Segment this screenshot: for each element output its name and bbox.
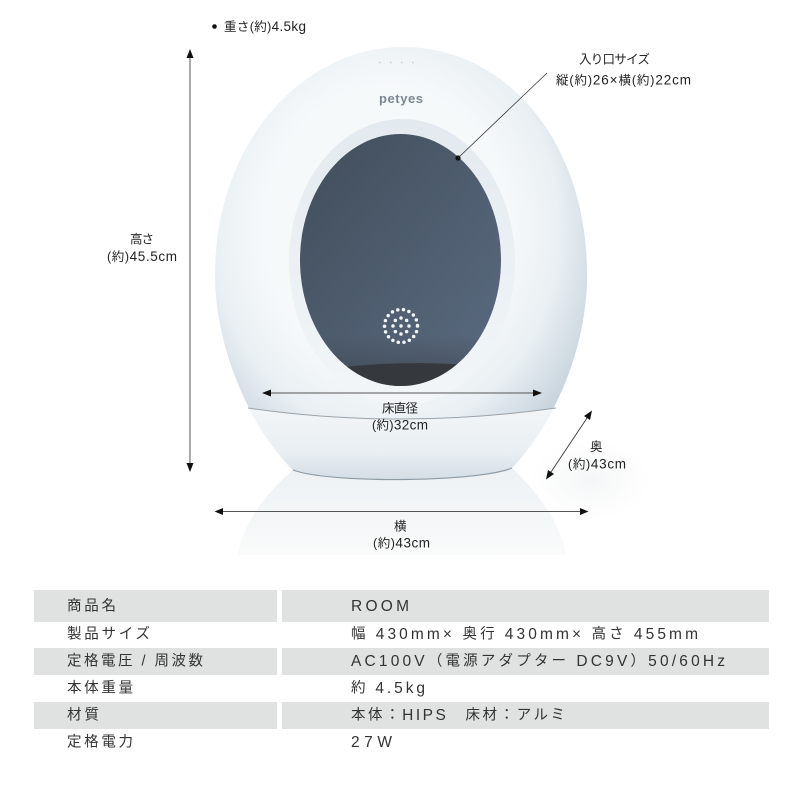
opening lower shading bbox=[328, 346, 474, 370]
entrance rim bbox=[289, 119, 515, 405]
seam line bbox=[248, 408, 556, 419]
width label bbox=[373, 520, 430, 550]
row: rated power bbox=[67, 734, 392, 751]
top indicator dots bbox=[379, 62, 423, 64]
width label: 横 bbox=[394, 520, 407, 534]
row: material bbox=[34, 702, 769, 729]
entrance opening bbox=[300, 134, 501, 386]
product reflection bbox=[238, 468, 566, 555]
entrance size callout bbox=[455, 52, 691, 161]
row: material: 本体：HIPS 床材：アルミ bbox=[351, 706, 565, 724]
row: weight: 本体重量 bbox=[67, 680, 133, 696]
row: rated power: 定格電力 bbox=[67, 734, 133, 750]
product: egg-shaped pet room bbox=[200, 47, 600, 490]
egg body bbox=[215, 47, 587, 480]
height label: 高さ bbox=[130, 232, 154, 246]
base section bbox=[250, 408, 553, 478]
depth arrow bbox=[546, 410, 592, 480]
row: product size bbox=[67, 626, 698, 643]
floor diameter label: (約)32cm bbox=[372, 418, 428, 432]
row: rated voltage: 定格電圧 / 周波数 bbox=[67, 652, 204, 670]
weight label: 重さ(約)4.5kg bbox=[224, 19, 306, 34]
row: rated voltage bbox=[34, 648, 769, 675]
floor shadow bbox=[530, 440, 650, 520]
row: product name: 商品名 bbox=[67, 598, 116, 614]
height label: (約)45.5cm bbox=[107, 249, 177, 264]
height label bbox=[107, 232, 177, 264]
row: product size: 製品サイズ bbox=[67, 626, 150, 642]
depth label bbox=[568, 440, 626, 472]
row: weight: 約 4.5kg bbox=[351, 680, 425, 697]
height arrow bbox=[186, 49, 194, 472]
row: product name: ROOM bbox=[351, 598, 409, 615]
entrance size callout: 入り口サイズ bbox=[579, 52, 650, 66]
floor diameter arrow bbox=[262, 390, 542, 396]
row: weight bbox=[67, 680, 425, 697]
bottom edge bbox=[293, 468, 512, 480]
floor mat inside bbox=[347, 363, 457, 386]
entrance size callout: 縦(約)26×横(約)22cm bbox=[556, 72, 691, 88]
depth label: 奥 bbox=[590, 440, 603, 454]
depth label: (約)43cm bbox=[568, 456, 626, 472]
width label: (約)43cm bbox=[373, 536, 430, 550]
floor diameter label bbox=[372, 400, 428, 432]
specification table bbox=[34, 590, 769, 751]
row: rated voltage: AC100V（電源アダプター DC9V）50/60Hz bbox=[351, 652, 725, 670]
width arrow bbox=[214, 508, 588, 515]
row: product name bbox=[34, 590, 769, 622]
floor diameter label: 床直径 bbox=[382, 400, 418, 416]
row: material: 材質 bbox=[67, 706, 99, 724]
row: rated power: 27W bbox=[351, 734, 392, 751]
brand logo: petyes bbox=[379, 91, 423, 106]
speaker dots bbox=[384, 310, 418, 342]
row: product size: 幅 430mm× 奥行 430mm× 高さ 455mm bbox=[351, 626, 698, 643]
